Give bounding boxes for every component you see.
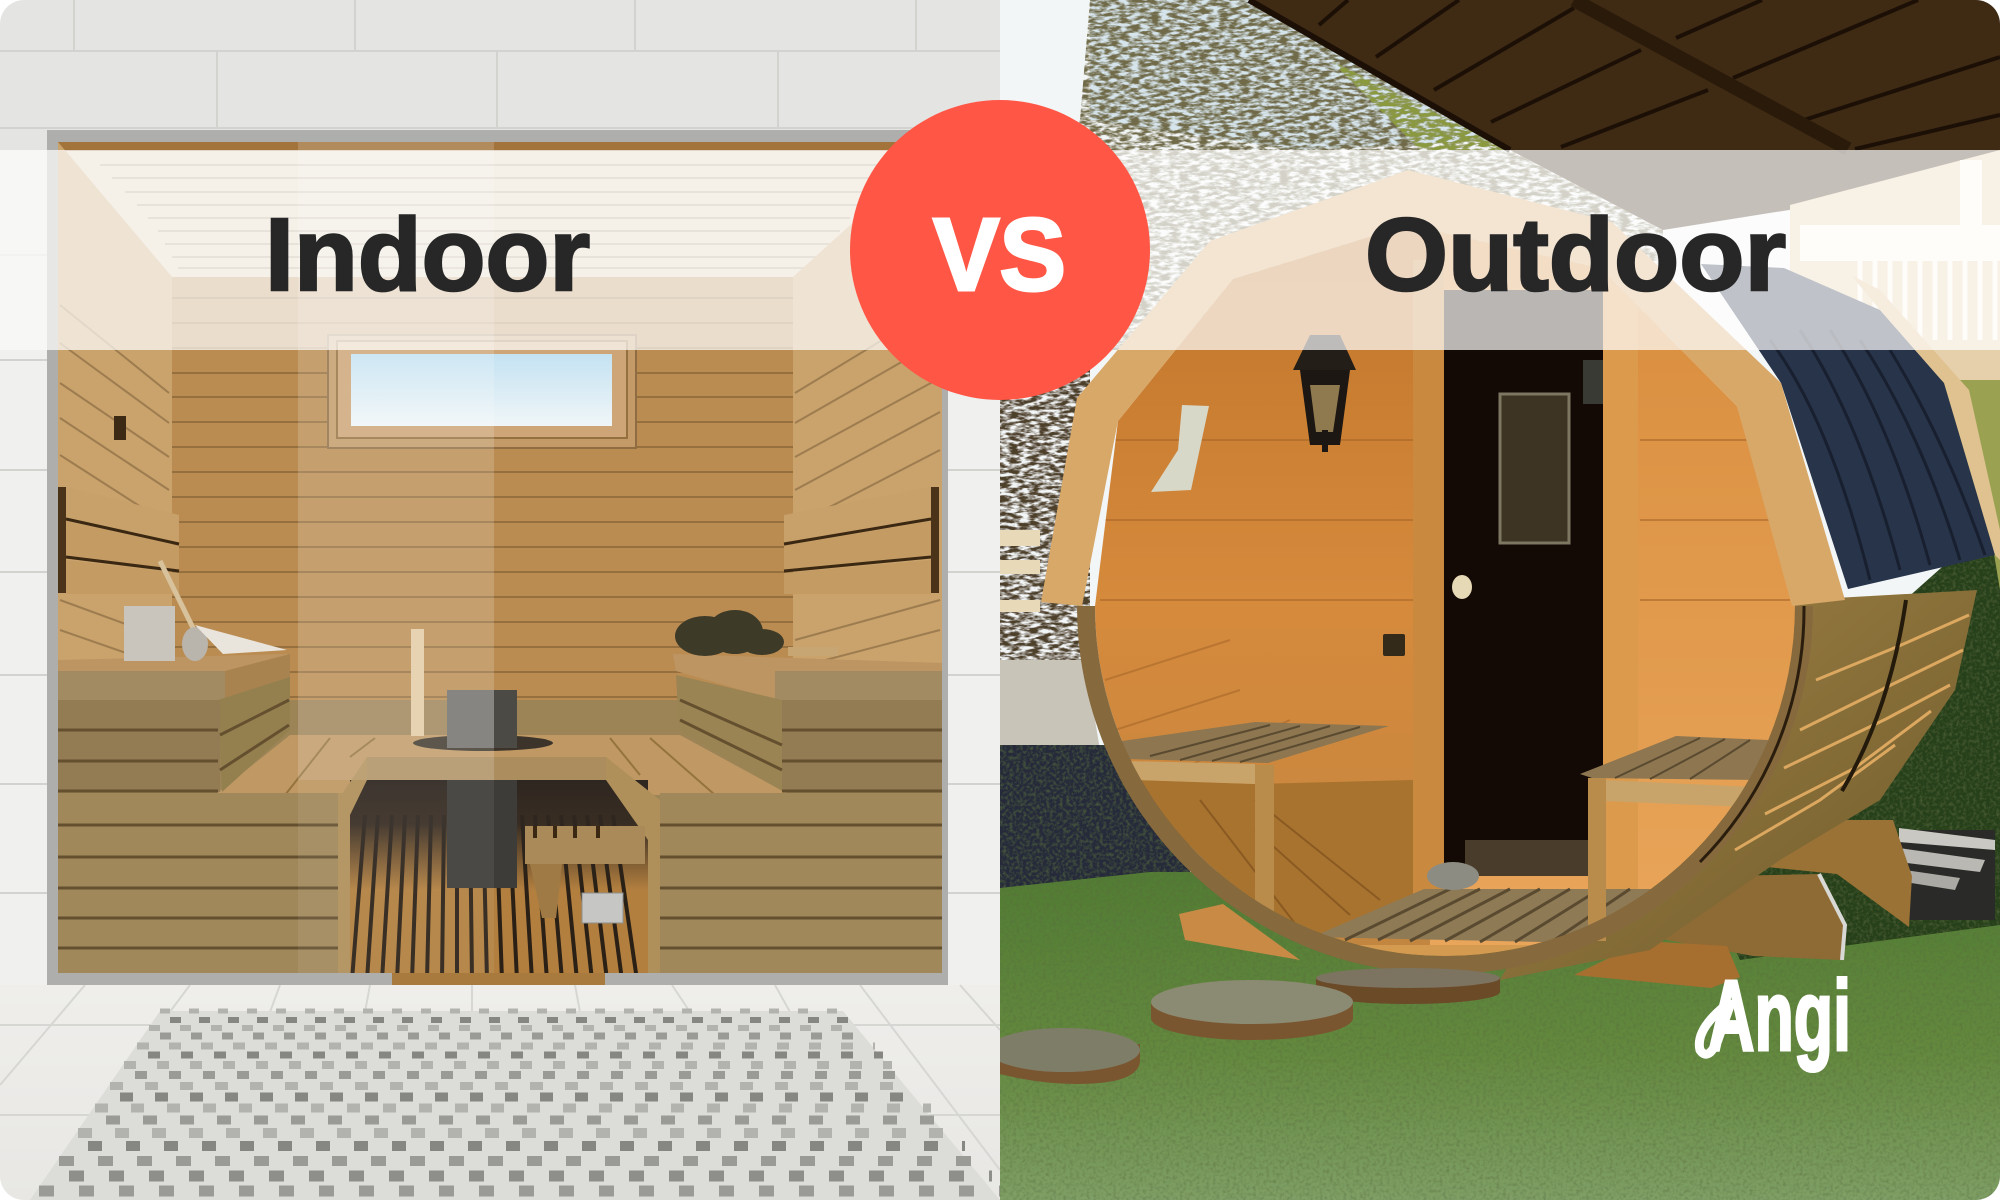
sauna frame — [47, 130, 948, 985]
right lower bench — [660, 793, 942, 950]
water bucket and ladle — [124, 561, 287, 661]
right bench — [1580, 736, 1768, 941]
evergreen highlight — [1330, 60, 1510, 150]
roof overhang — [1249, 0, 2000, 230]
right backrest — [784, 487, 939, 594]
wooden pallet — [1899, 828, 1995, 920]
lower wall planks — [1200, 800, 1380, 930]
pale blue sky patch — [1090, 0, 1500, 150]
fence — [1000, 530, 1040, 612]
interior walls — [1090, 220, 1800, 990]
door frame — [1413, 260, 1444, 900]
background branches — [1000, 350, 1090, 670]
mosaic rug — [30, 1011, 1000, 1200]
heading: Indoor: Indoor — [265, 197, 590, 312]
under deck — [1325, 945, 1574, 965]
barrel side — [1500, 590, 1977, 980]
frame bottom rail — [350, 973, 648, 985]
right hedge — [1736, 380, 2000, 960]
wall notice — [1151, 405, 1209, 492]
wall switch — [1383, 634, 1405, 656]
heading: Outdoor: Outdoor — [1365, 197, 1786, 312]
shingled roof — [1701, 264, 1995, 589]
barrel ring — [1077, 606, 1813, 974]
marble floor — [0, 985, 1000, 1200]
sauna step stool — [525, 826, 645, 918]
panel: indoor sauna photo — [0, 0, 1000, 1200]
stump: far — [1316, 968, 1500, 1004]
glass reflection — [298, 142, 494, 985]
window — [328, 335, 636, 448]
slatted floor — [338, 757, 660, 983]
logo: Angi: Angi — [1708, 960, 1851, 1072]
left bench — [1115, 722, 1389, 921]
platform floor — [215, 735, 790, 795]
roof fascia — [1041, 170, 1845, 606]
sky — [1000, 0, 2000, 900]
right upper bench — [673, 654, 942, 792]
panel: outdoor sauna photo — [988, 0, 2000, 1200]
sauna pole — [411, 629, 424, 736]
VS badge: VS — [933, 197, 1066, 312]
left upper bench — [58, 654, 290, 792]
stone on deck — [1427, 862, 1479, 890]
stump: near — [988, 1028, 1140, 1084]
left lower bench — [58, 793, 342, 950]
sauna stove — [413, 690, 553, 888]
left side wall — [58, 142, 172, 660]
stump: middle — [1151, 980, 1353, 1040]
deck — [1312, 889, 1663, 943]
wall lantern — [1293, 335, 1356, 452]
VS badge — [850, 100, 1150, 400]
sauna ceiling — [58, 142, 942, 277]
sauna door — [1444, 290, 1603, 876]
logo: Angi — [1699, 960, 1851, 1072]
shadow under bench — [1137, 780, 1413, 940]
translucent heading band — [0, 150, 2000, 350]
tiled wall — [0, 0, 1000, 990]
glass door hinge — [582, 893, 623, 923]
back wall — [172, 277, 793, 747]
background tree — [1079, 0, 1663, 350]
gravel — [1000, 660, 1190, 895]
left backrest — [58, 487, 179, 594]
bench base — [58, 700, 942, 800]
foundation wedges — [1179, 820, 1912, 988]
right side wall — [793, 224, 942, 663]
balcony building — [1790, 150, 2000, 380]
birch whisk — [675, 610, 838, 656]
lawn — [1000, 872, 2000, 1200]
far fascia — [1851, 275, 2000, 560]
